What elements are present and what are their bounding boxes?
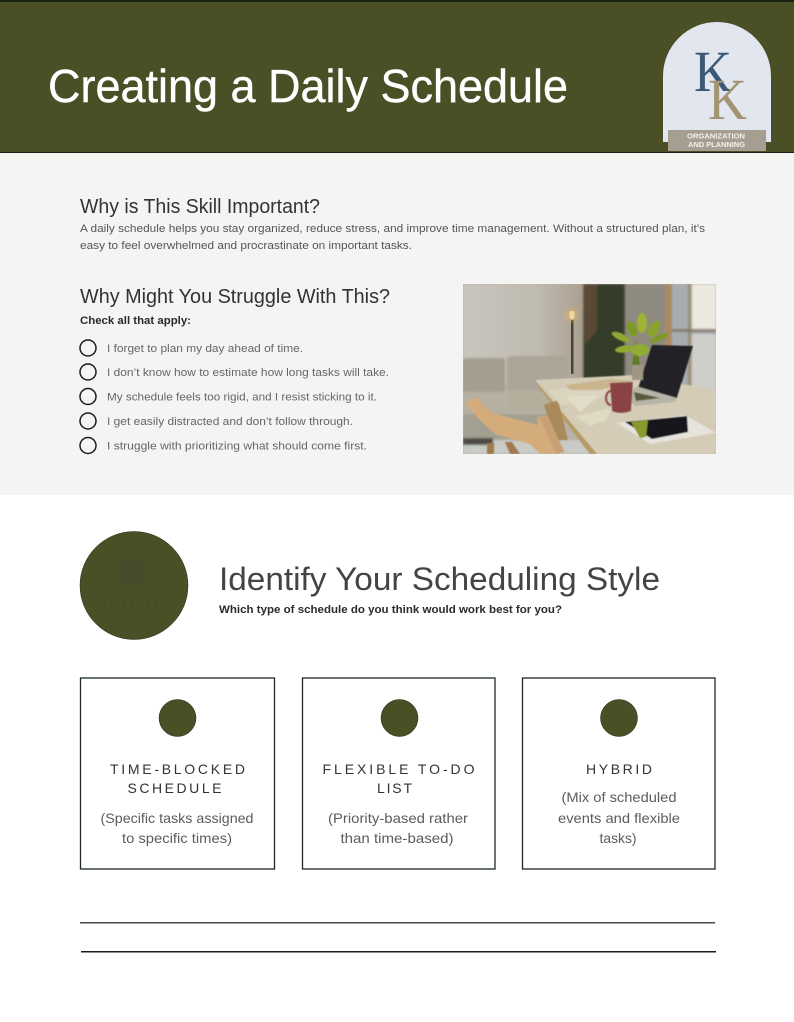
card: flexible to-do list: [302, 678, 495, 869]
table: [535, 375, 716, 454]
checklist item 1: I forget to plan my day ahead of time.: [107, 343, 303, 355]
header banner: [0, 0, 794, 153]
logo caption: ORGANIZATION: [687, 132, 745, 140]
card description: [558, 789, 680, 846]
checklist item 5: I struggle with prioritizing what should come first.: [107, 440, 367, 452]
photo: desk with laptop: [463, 284, 716, 454]
chair: [465, 397, 565, 454]
writing line 1: [80, 922, 715, 924]
card description: events and flexible: [558, 810, 680, 826]
card: hybrid: [522, 678, 715, 869]
card icon: [381, 700, 418, 736]
logo letters: [694, 39, 747, 132]
mug: [610, 382, 633, 413]
wall and window: [463, 284, 588, 384]
card description: than time-based): [340, 830, 454, 846]
panel: skill importance and struggles: [0, 153, 794, 495]
icon: activity grid: [119, 560, 144, 584]
heading: why important: Why is This Skill Important?: [80, 196, 320, 218]
card icon: [600, 700, 638, 736]
checklist item 2: I don’t know how to estimate how long tasks will take.: [107, 367, 389, 379]
checklist item 3: My schedule feels too rigid, and I resist sticking to it.: [107, 392, 377, 404]
checklist item 4: [80, 413, 353, 429]
card title: TIME-BLOCKED: [110, 761, 245, 777]
logo letters: K: [708, 67, 747, 132]
activity badge: [80, 532, 188, 640]
card title: LIST: [377, 780, 412, 796]
logo caption: AND PLANNING: [688, 140, 745, 149]
card description: tasks): [600, 830, 636, 846]
card title: [110, 761, 245, 796]
logo badge: [663, 22, 771, 151]
logo caption: [668, 130, 766, 151]
card title: SCHEDULE: [128, 780, 222, 796]
card icon: [159, 700, 196, 736]
paragraph: why important: [80, 223, 706, 252]
checklist item 2: [80, 364, 389, 380]
checklist: [80, 340, 389, 454]
card: time-blocked schedule: [80, 678, 274, 869]
paragraph: why important: easy to feel overwhelmed and procrastinate on important tasks.: [80, 240, 412, 252]
lamp: [571, 320, 574, 374]
card description: (Priority-based rather: [328, 810, 468, 826]
card title: FLEXIBLE TO-DO: [322, 761, 475, 777]
subheading: check all: Check all that apply:: [80, 315, 191, 327]
paragraph: why important: A daily schedule helps you stay organized, reduce stress, and improve time management. Without a structured plan, it's: [80, 223, 706, 235]
card description: [100, 810, 254, 846]
checklist item 4: I get easily distracted and don’t follow through.: [107, 416, 353, 428]
writing line 2: [81, 951, 716, 952]
card description: (Specific tasks assigned: [100, 810, 254, 826]
checklist item 5: [80, 438, 367, 454]
card title: HYBRID: [586, 761, 652, 777]
section subheading: Which type of schedule do you think would work best for you?: [219, 604, 562, 616]
card description: [328, 810, 468, 846]
laptop: [636, 345, 693, 398]
tablet: [617, 415, 716, 444]
card title: [322, 761, 475, 796]
logo letters: K: [694, 39, 732, 104]
checklist item 1: [80, 340, 303, 356]
activity label: ACTIVITY: [98, 598, 170, 610]
section heading: Identify Your Scheduling Style: [219, 561, 660, 597]
card description: (Mix of scheduled: [562, 789, 676, 805]
title: Creating a Daily Schedule: [48, 60, 568, 112]
card description: to specific times): [122, 830, 232, 846]
sofa: [463, 358, 505, 392]
checklist item 3: [80, 388, 377, 404]
plant: [632, 340, 640, 365]
pot: [632, 365, 643, 380]
heading: why struggle: Why Might You Struggle With This?: [80, 286, 390, 308]
